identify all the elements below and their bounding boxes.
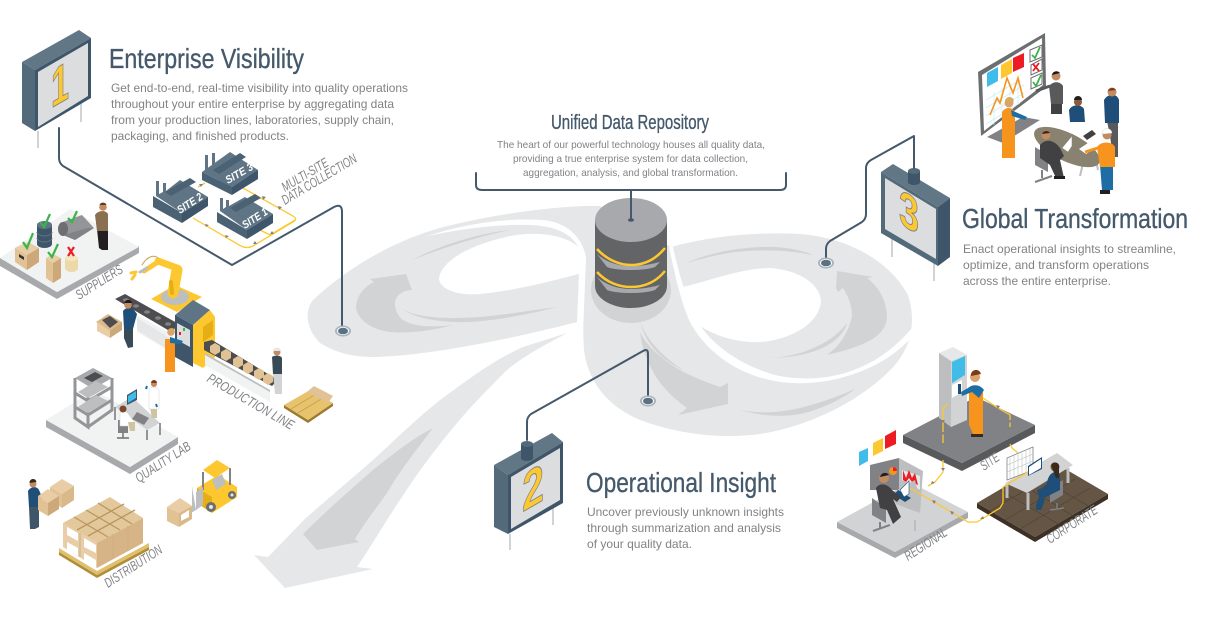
meeting table — [1029, 118, 1105, 176]
heading: unified data repository: Unified Data Repository — [551, 112, 709, 134]
sign 3 — [881, 164, 950, 281]
wire anchor 2 — [640, 396, 656, 406]
label: distribution: DISTRIBUTION — [101, 542, 165, 591]
lab desk — [115, 389, 160, 440]
icon: cardboard box — [15, 242, 39, 270]
site 3 building — [202, 152, 258, 195]
person: woman at table — [1069, 96, 1085, 122]
meeting room illustration — [978, 33, 1119, 194]
cubicle — [870, 458, 923, 531]
database cylinder — [591, 198, 671, 323]
enterprise visibility description: from your production lines, laboratories, supply chain, — [111, 113, 394, 127]
multi-site data collection illustration — [153, 152, 296, 248]
robot base — [151, 285, 202, 312]
person: man in blue standing — [1104, 88, 1119, 157]
enterprise visibility description: packaging, and finished products. — [111, 129, 289, 143]
sign 1: 1 — [51, 49, 69, 120]
enterprise visibility description — [111, 81, 408, 143]
site 1 building: SITE 1 — [240, 206, 270, 232]
icon: crate — [46, 254, 61, 283]
pallet — [59, 543, 149, 578]
person: lab technician seated — [117, 406, 135, 438]
label: suppliers: SUPPLIERS — [73, 262, 126, 303]
operational insight description: of your quality data. — [587, 537, 692, 551]
status icons — [859, 430, 896, 466]
right conveyor — [204, 340, 278, 402]
global transformation description — [963, 242, 1176, 288]
label: production line: PRODUCTION LINE — [204, 371, 298, 433]
person: site worker — [961, 370, 984, 437]
site connection lines — [193, 183, 296, 248]
quality lab illustration — [46, 368, 178, 474]
presentation board — [978, 33, 1046, 143]
person: operator in orange — [1002, 97, 1027, 158]
site 2 building — [153, 178, 208, 223]
repository bracket connector — [476, 173, 786, 220]
operational insight description: Uncover previously unknown insights — [587, 505, 784, 519]
distribution illustration — [28, 460, 237, 578]
person: worker in orange — [165, 328, 183, 372]
stacked boxes — [63, 497, 143, 568]
central infinity swoosh flow — [254, 190, 912, 588]
person: scientist standing — [146, 380, 159, 418]
repository description: aggregation, analysis, and global transformation. — [523, 167, 738, 179]
person: regional analyst — [872, 473, 901, 531]
global transformation description: Enact operational insights to streamline, — [963, 242, 1176, 256]
robot arm — [131, 256, 177, 293]
site 2 building: SITE 2 — [175, 191, 205, 217]
person: inspector — [95, 203, 108, 250]
left lobe arrow — [356, 274, 453, 333]
lower lobe arrow — [640, 332, 728, 415]
network lines — [910, 398, 1028, 522]
sign 3: 3 — [899, 178, 919, 246]
person: warehouse worker — [28, 479, 42, 529]
networked sites illustration — [837, 347, 1108, 558]
white stripe: left — [427, 220, 586, 333]
label: corporate: CORPORATE — [1043, 502, 1101, 547]
repository description: providing a true enterprise system for data collection, — [513, 153, 748, 165]
suppliers platform — [0, 203, 139, 299]
big arrow to the lower left — [254, 333, 567, 588]
open box of parts — [96, 314, 122, 338]
production line illustration — [96, 256, 333, 423]
small boxes — [38, 479, 74, 516]
heading: operational insight: Operational Insight — [586, 467, 776, 498]
enterprise visibility description: throughout your entire enterprise by aggregating data — [111, 97, 394, 111]
label: data collection: DATA COLLECTION — [279, 151, 360, 208]
wire anchor 1 — [335, 326, 351, 336]
operational insight description — [587, 505, 784, 551]
forklift — [172, 460, 237, 522]
person: seated man — [1035, 130, 1065, 182]
corporate floor — [977, 460, 1108, 542]
label: multi-site: MULTI-SITE — [279, 155, 332, 195]
conveyor boxes — [210, 343, 273, 385]
icon: steel roll — [58, 215, 94, 240]
site 3 building: SITE 3 — [224, 161, 255, 187]
site 1 building — [217, 194, 273, 239]
label: regional: REGIONAL — [901, 525, 950, 564]
corporate desk — [1005, 447, 1073, 510]
person: engineer in orange shirt — [1085, 128, 1115, 194]
wire from sign 1 — [59, 128, 342, 330]
wire from sign 3 — [826, 136, 914, 262]
site platform — [903, 397, 1035, 471]
left conveyor — [115, 294, 177, 353]
machine cabinet — [175, 300, 215, 368]
repository description — [497, 139, 765, 179]
right lobe arrow — [827, 271, 887, 355]
person: corporate woman — [1036, 462, 1064, 510]
label: quality lab: QUALITY LAB — [132, 439, 193, 486]
icon: jug — [65, 255, 78, 272]
sign 2: 2 — [522, 451, 544, 524]
person: operator in blue — [123, 300, 137, 348]
enterprise visibility description: Get end-to-end, real-time visibility into quality operations — [111, 81, 408, 95]
white stripe: right — [669, 247, 912, 383]
sign 1 — [22, 30, 91, 148]
icon: drum — [37, 221, 52, 248]
kiosk — [939, 347, 967, 427]
heading: enterprise visibility: Enterprise Visibility — [109, 43, 304, 74]
person: packer — [272, 348, 282, 394]
box on forks — [167, 498, 192, 527]
shelving unit — [75, 368, 112, 427]
operational insight description: through summarization and analysis — [587, 521, 781, 535]
person: presenter in suit — [1036, 71, 1063, 114]
repository description: The heart of our powerful technology houses all quality data, — [497, 139, 765, 151]
regional platform — [837, 482, 968, 558]
wire anchor 3 — [818, 258, 834, 268]
global transformation description: optimize, and transform operations — [963, 258, 1149, 272]
pallet of boxes — [284, 386, 333, 423]
label: site: SITE — [977, 449, 1003, 473]
global transformation description: across the entire enterprise. — [963, 274, 1111, 288]
green checks and red cross — [23, 211, 77, 257]
wire from sign 2 — [527, 350, 648, 440]
sign 2 — [494, 433, 563, 550]
